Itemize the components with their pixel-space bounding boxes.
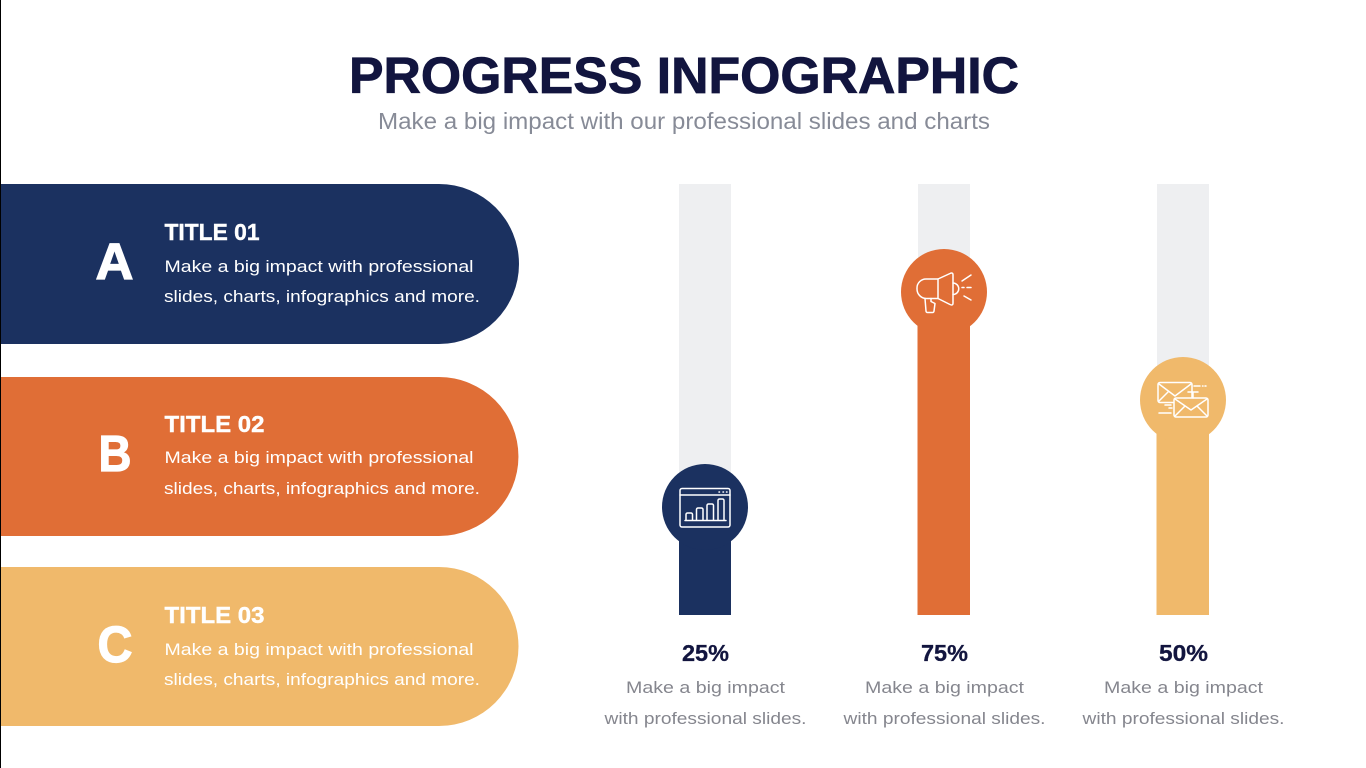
text: panel B description: slides, charts, infographics and more. <box>164 479 480 498</box>
value: 25%: 25% <box>682 640 729 666</box>
text: column 1 description: Make a big impact <box>626 678 785 697</box>
subtitle: Make a big impact with our professional slides and charts <box>378 108 990 134</box>
title: PROGRESS INFOGRAPHIC <box>349 47 1019 104</box>
text: panel C description: Make a big impact with professional <box>164 640 474 659</box>
progress column: 75% <box>842 184 1046 728</box>
letter A: A <box>96 233 134 290</box>
text: panel B description <box>164 448 480 498</box>
panel: C <box>1 567 518 726</box>
text: panel A description: slides, charts, infographics and more. <box>164 287 480 306</box>
value: 75%: 75% <box>921 640 968 666</box>
letter C: C <box>98 616 132 673</box>
heading: title 01: TITLE 01 <box>164 219 260 245</box>
text: column 1 description <box>603 678 806 728</box>
heading: title 02: TITLE 02 <box>164 411 264 437</box>
text: panel C description <box>164 640 480 689</box>
value: 50%: 50% <box>1159 640 1208 666</box>
panel: A <box>1 184 519 344</box>
panel: B <box>1 377 518 536</box>
text: panel B description: Make a big impact with professional <box>164 448 474 467</box>
progress column: 50% <box>1081 184 1284 728</box>
text: column 3 description: with professional slides. <box>1081 709 1284 728</box>
icon: megaphone <box>917 273 971 312</box>
text: panel A description: Make a big impact with professional <box>164 257 474 276</box>
text: panel C description: slides, charts, infographics and more. <box>164 670 480 689</box>
letter B: B <box>98 425 132 482</box>
text: column 1 description: with professional slides. <box>603 709 806 728</box>
text: panel A description <box>164 257 480 306</box>
text: column 3 description: Make a big impact <box>1104 678 1263 697</box>
text: column 2 description <box>842 678 1046 728</box>
text: column 2 description: with professional slides. <box>842 709 1046 728</box>
icon: envelopes <box>1158 382 1208 417</box>
icon: browser bar chart <box>680 488 730 527</box>
text: column 3 description <box>1081 678 1284 728</box>
progress column: 25% <box>603 184 806 728</box>
heading: title 03: TITLE 03 <box>164 602 264 628</box>
text: column 2 description: Make a big impact <box>865 678 1024 697</box>
